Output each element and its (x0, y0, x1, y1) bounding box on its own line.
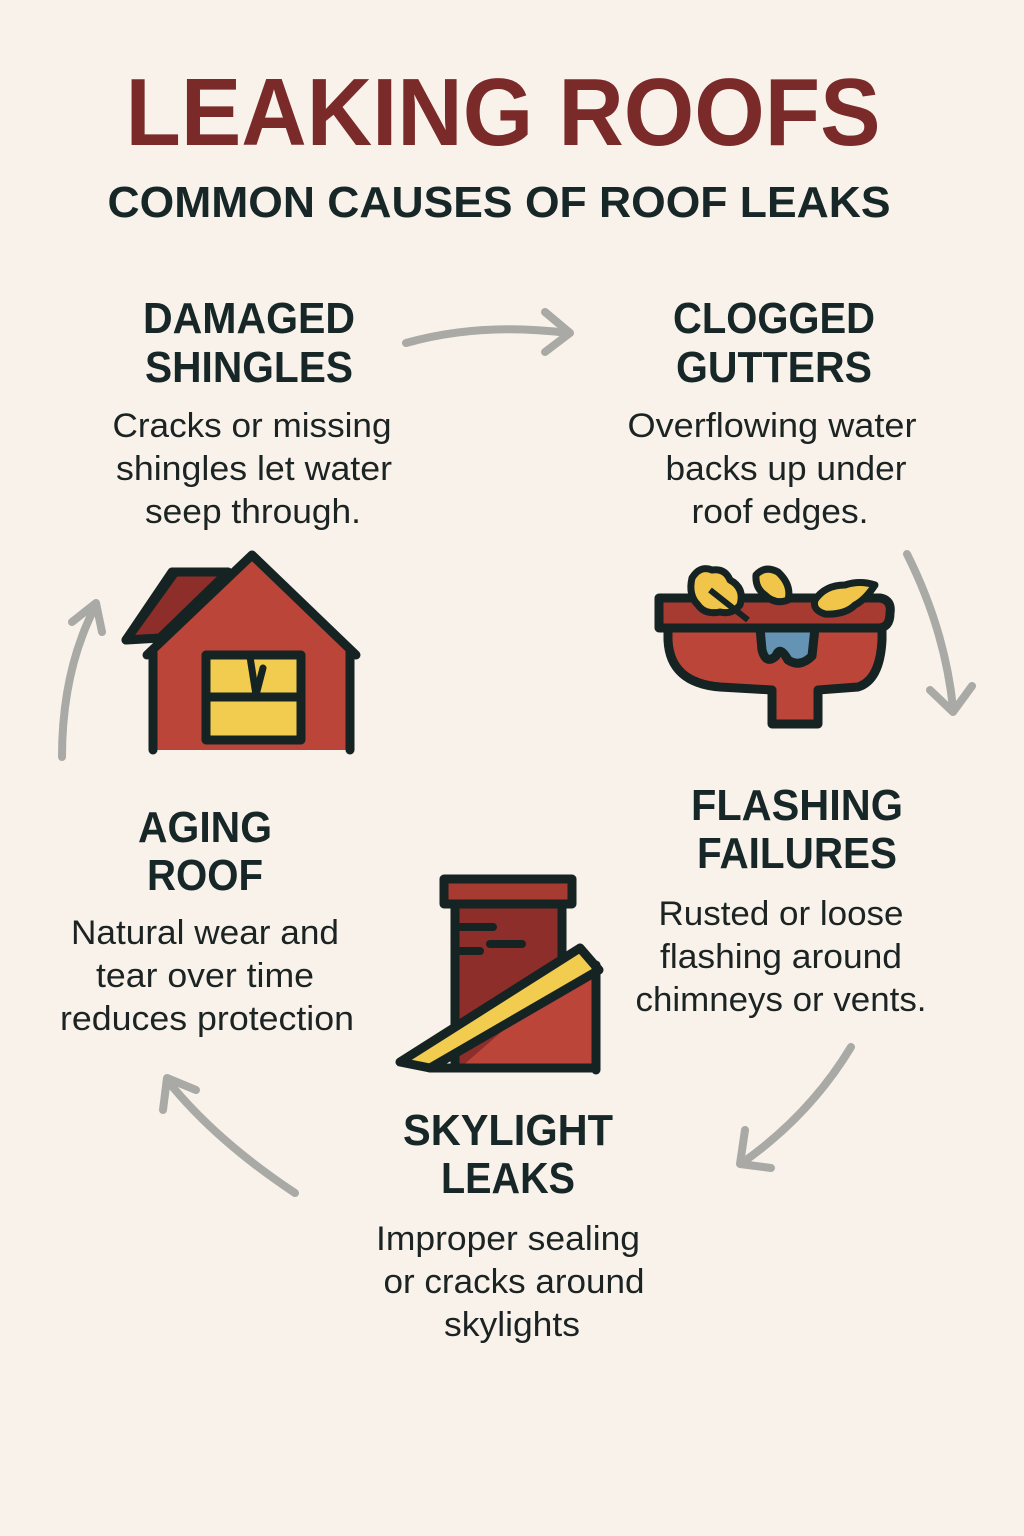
panel: clogged gutters: CLOGGED (673, 294, 875, 343)
panel: clogged gutters (628, 294, 916, 531)
icon: gutter (659, 569, 890, 724)
panel: skylight leaks (376, 1106, 644, 1344)
panel: skylight leaks: or cracks around (384, 1263, 644, 1301)
panel: aging roof: ROOF (147, 851, 263, 900)
panel: flashing failures: chimneys or vents. (636, 981, 926, 1019)
panel: skylight leaks: skylights (444, 1306, 580, 1344)
panel: aging roof: reduces protection (60, 1000, 354, 1038)
panel: aging roof: Natural wear and (71, 914, 339, 952)
icon: chimney flashing (400, 879, 599, 1070)
panel: clogged gutters: roof edges. (692, 493, 868, 531)
panel: aging roof: AGING (138, 803, 272, 852)
arrow: skylight to aging (163, 1078, 295, 1193)
panel: damaged shingles: DAMAGED (143, 294, 355, 343)
arrow: flashing to skylight (740, 1047, 851, 1168)
arrow: damaged to clogged (406, 312, 570, 352)
panel: flashing failures (636, 781, 926, 1019)
icon: house (126, 555, 356, 750)
subtitle: COMMON CAUSES OF ROOF LEAKS (108, 178, 890, 227)
panel: skylight leaks: Improper sealing (376, 1220, 640, 1258)
panel: damaged shingles: SHINGLES (145, 343, 353, 392)
panel: aging roof (60, 803, 354, 1038)
panel: damaged shingles: shingles let water (116, 450, 392, 488)
panel: skylight leaks: LEAKS (441, 1154, 575, 1203)
panel: damaged shingles: seep through. (145, 493, 361, 531)
panel: clogged gutters: Overflowing water (628, 407, 916, 445)
panel: aging roof: tear over time (96, 957, 314, 995)
arrow: clogged to flashing (907, 554, 972, 712)
panel: clogged gutters: backs up under (666, 450, 906, 488)
title: LEAKING ROOFS (126, 59, 880, 166)
panel: skylight leaks: SKYLIGHT (403, 1106, 613, 1155)
panel: flashing failures: FLASHING (691, 781, 903, 830)
panel: damaged shingles (112, 294, 392, 531)
panel: flashing failures: Rusted or loose (658, 895, 904, 933)
arrow: aging to damaged (62, 603, 102, 757)
panel: clogged gutters: GUTTERS (676, 343, 872, 392)
panel: flashing failures: FAILURES (697, 829, 897, 878)
panel: damaged shingles: Cracks or missing (112, 407, 392, 445)
panel: flashing failures: flashing around (660, 938, 902, 976)
